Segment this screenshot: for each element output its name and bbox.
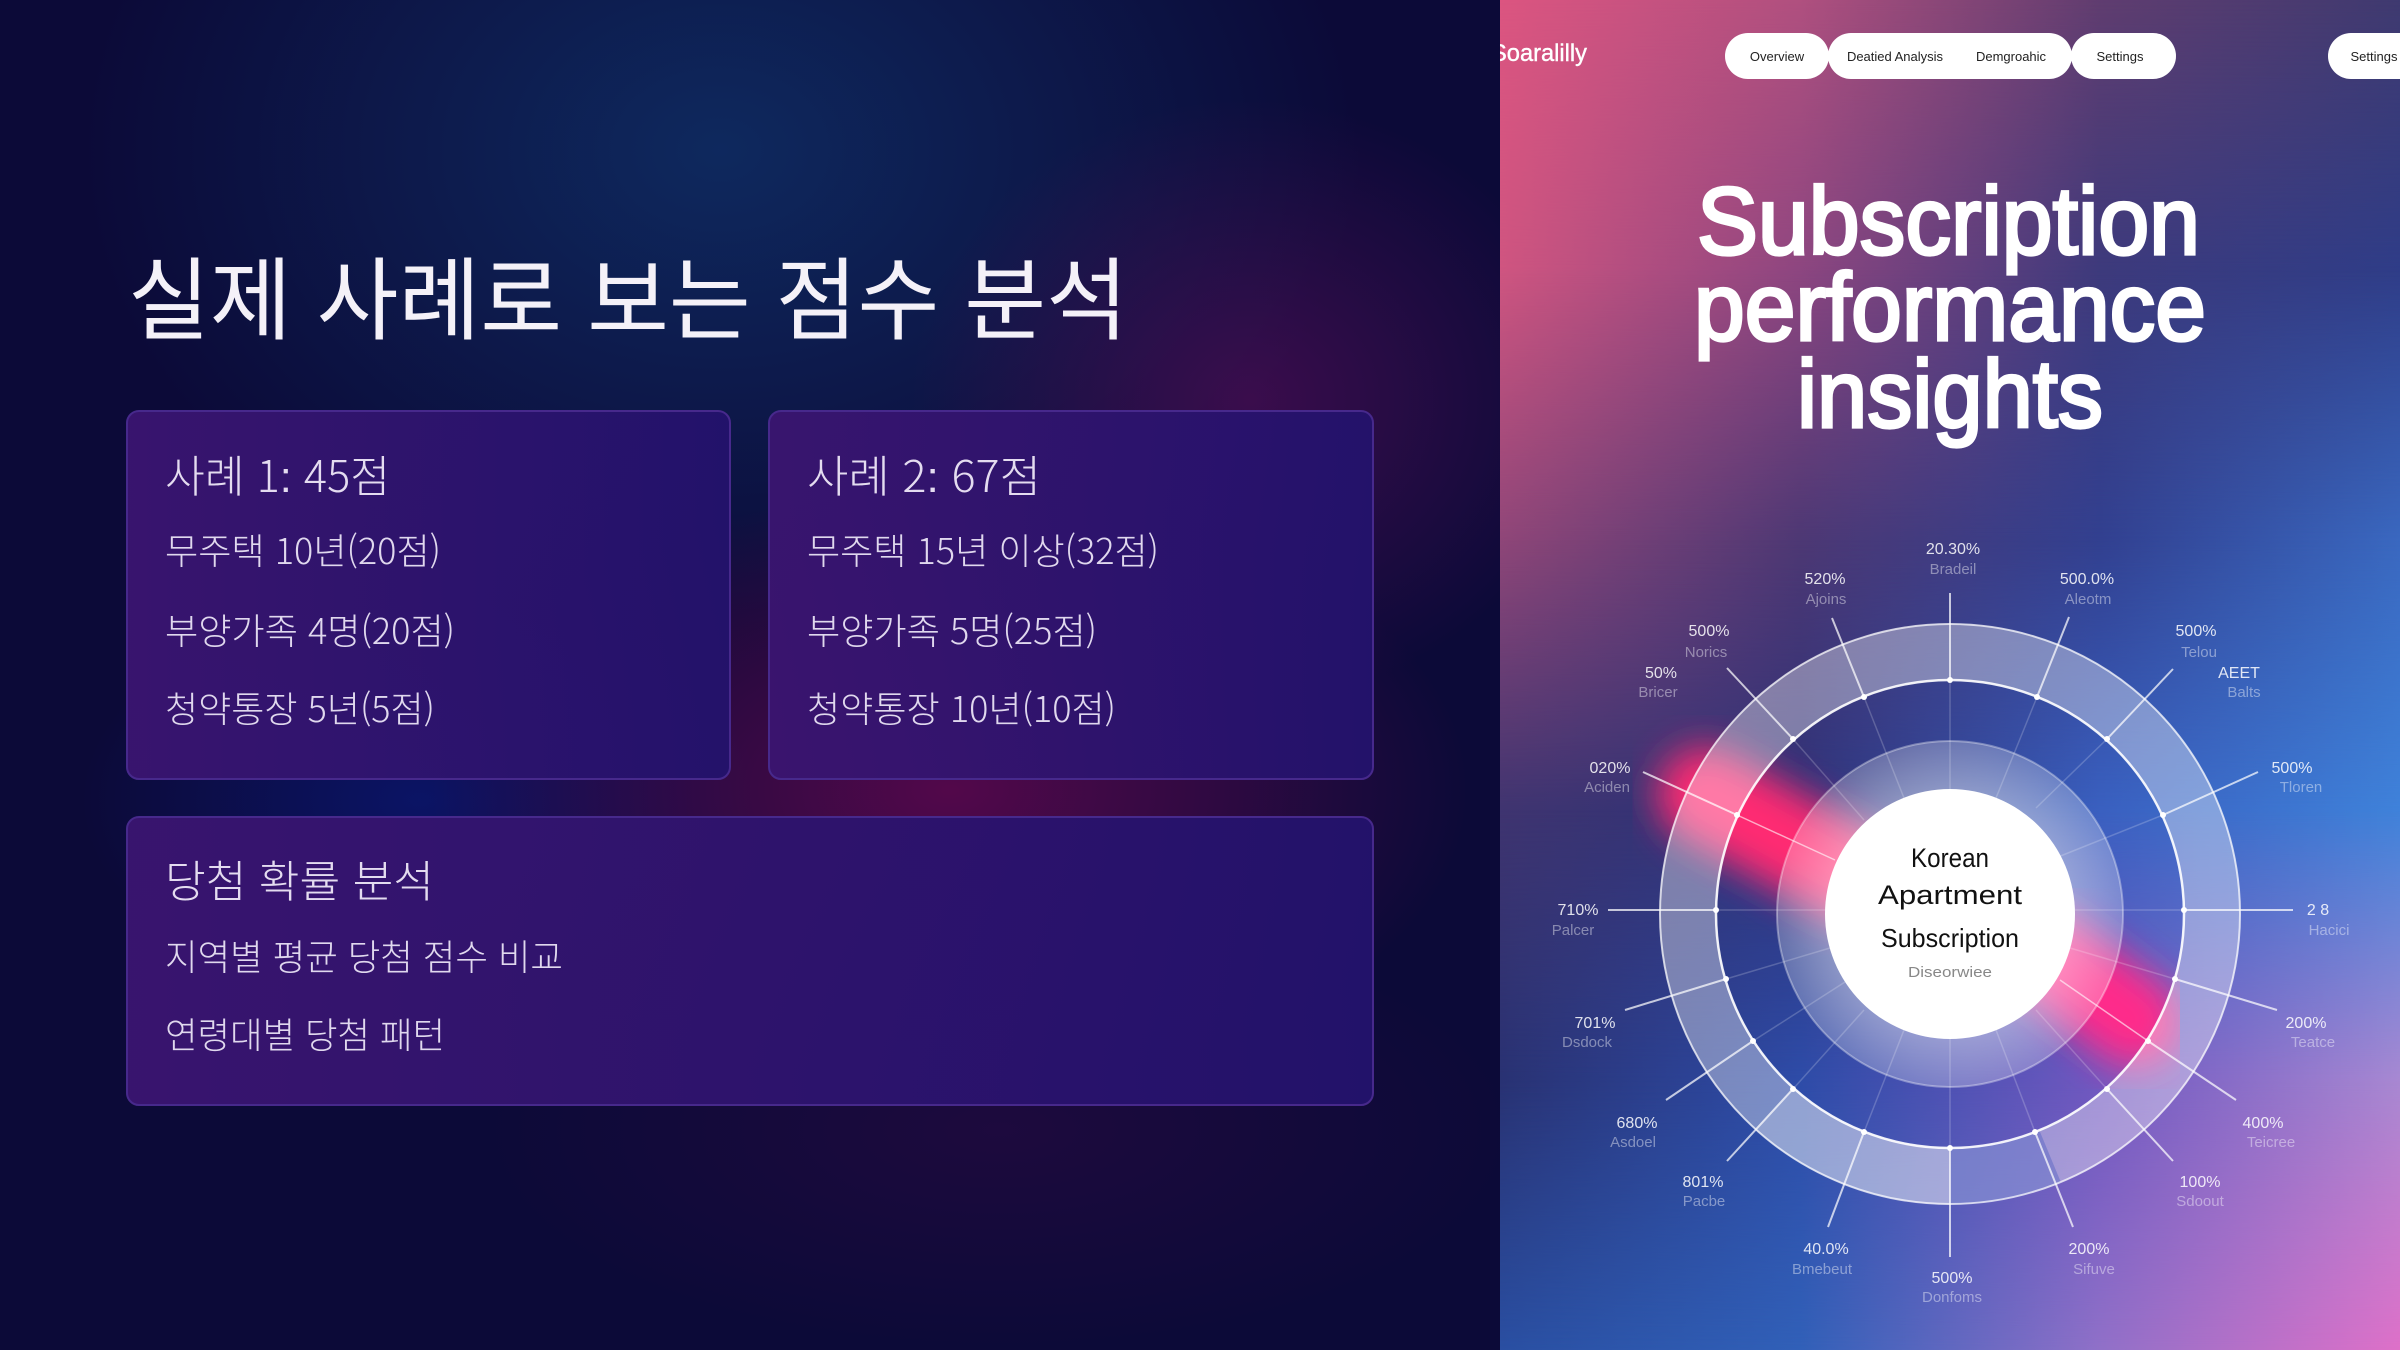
chart labels: Bricer: [1638, 684, 1678, 701]
gradient mesh background: [1500, 63, 2400, 1350]
chart labels: Teicree: [2247, 1134, 2295, 1151]
case 2 list item: no-home period: 무주택 15년 이상(32점): [807, 523, 1159, 575]
nav pill: overview: Overview: [1750, 49, 1805, 64]
case 1 list item: no-home period: 무주택 10년(20점): [165, 523, 441, 575]
chart labels: Aleotm: [2065, 591, 2111, 608]
chart labels: Pacbe: [1683, 1193, 1725, 1210]
chart labels: Sifuve: [2073, 1261, 2115, 1278]
main heading: insights: [1797, 341, 2103, 448]
pink highlight upper left: [1705, 795, 1850, 875]
panel: case 1: [127, 411, 730, 779]
chart labels: 500%: [1932, 1270, 1972, 1287]
radial chart: [1552, 541, 2349, 1306]
chart labels: 40.0%: [1803, 1241, 1849, 1258]
nav pill: analysis and demographic: [1828, 33, 2072, 79]
chart labels: Donfoms: [1922, 1289, 1982, 1306]
chart labels: 500%: [1689, 623, 1729, 640]
chart labels: 200%: [2286, 1015, 2326, 1032]
pink highlight lower right: [2045, 955, 2135, 1022]
chart labels: 020%: [1590, 760, 1630, 777]
chart labels: Tloren: [2280, 779, 2322, 796]
main heading: Subscription: [1697, 168, 2200, 275]
chart labels: Asdoel: [1610, 1134, 1656, 1151]
navigation pills: [1725, 33, 2400, 79]
chart labels: Aciden: [1584, 779, 1630, 796]
case 1 heading: 사례 1: 45점: [165, 441, 390, 505]
chart labels: 50%: [1645, 665, 1677, 682]
chart labels: 500%: [2176, 623, 2216, 640]
chart labels: 710%: [1558, 902, 1598, 919]
center hub: [1825, 789, 2075, 1039]
nav pill: settings: Settings: [2097, 49, 2144, 64]
inner ring: [1777, 741, 2123, 1087]
case 2 list item: dependents: 부양가족 5명(25점): [807, 603, 1097, 655]
chart labels: Bradeil: [1930, 561, 1976, 578]
panel: right gradient dashboard: [1500, 0, 2400, 1350]
chart labels: 801%: [1683, 1174, 1723, 1191]
chart labels: Telou: [2181, 644, 2217, 661]
chart labels: Balts: [2227, 684, 2261, 701]
chart labels: 400%: [2243, 1115, 2283, 1132]
faint spokes: [1716, 680, 2184, 1148]
chart labels: 500.0%: [2060, 571, 2114, 588]
analysis item: age patterns: 연령대별 당첨 패턴: [165, 1007, 445, 1059]
case 1 list item: dependents: 부양가족 4명(20점): [165, 603, 455, 655]
chart labels: Dsdock: [1562, 1034, 1613, 1051]
chart labels: Norics: [1685, 644, 1727, 661]
chart labels: 200%: [2069, 1241, 2109, 1258]
chart labels: 701%: [1575, 1015, 1615, 1032]
chart labels: 100%: [2180, 1174, 2220, 1191]
chart labels: Teatce: [2291, 1034, 2335, 1051]
chart labels: 500%: [2272, 760, 2312, 777]
chart labels: Hacici: [2309, 922, 2349, 939]
nav pill: far-right settings: Settings: [2351, 49, 2398, 64]
chart labels: Bmebeut: [1792, 1261, 1853, 1278]
chart labels: 2 8: [2307, 902, 2329, 919]
analysis heading: 당첨 확률 분석: [165, 846, 434, 910]
chart labels: Ajoins: [1806, 591, 1846, 608]
panel: win probability analysis: [127, 817, 1373, 1105]
main heading: [1694, 168, 2206, 448]
chart labels: 520%: [1805, 571, 1845, 588]
chart labels: Palcer: [1552, 922, 1594, 939]
nav pill: settings: [2071, 33, 2176, 79]
panel: case 2: [769, 411, 1373, 779]
center hub: Subscription: [1881, 923, 2019, 953]
center hub: Diseorwiee: [1908, 964, 1992, 981]
center hub: Korean: [1911, 843, 1989, 873]
bright spokes: [1608, 593, 2293, 1257]
chart labels: 680%: [1617, 1115, 1657, 1132]
case 2 heading: 사례 2: 67점: [807, 441, 1041, 505]
panel: left dark slide: [0, 0, 1500, 1350]
main heading: performance: [1694, 254, 2206, 361]
chart labels: AEET: [2218, 665, 2260, 682]
outer ring: [1660, 624, 2240, 1204]
analysis item: regional scores: 지역별 평균 당첨 점수 비교: [165, 929, 563, 981]
chart labels: [1552, 541, 2349, 1306]
nav pill: analysis and demographic: Deatied Analysis: [1847, 49, 1944, 64]
spoke dots: [1713, 677, 2187, 1151]
center hub: Apartment: [1878, 880, 2023, 910]
title: 실제 사례로 보는 점수 분석: [128, 228, 1128, 358]
nav pill: far-right settings: [2328, 33, 2400, 79]
nav pill: overview: [1725, 33, 1829, 79]
nav pill: analysis and demographic: Demgroahic: [1976, 49, 2047, 64]
chart labels: 20.30%: [1926, 541, 1980, 558]
chart labels: Sdoout: [2176, 1193, 2225, 1210]
case 1 list item: savings account: 청약통장 5년(5점): [165, 681, 435, 733]
case 2 list item: savings account: 청약통장 10년(10점): [807, 681, 1116, 733]
